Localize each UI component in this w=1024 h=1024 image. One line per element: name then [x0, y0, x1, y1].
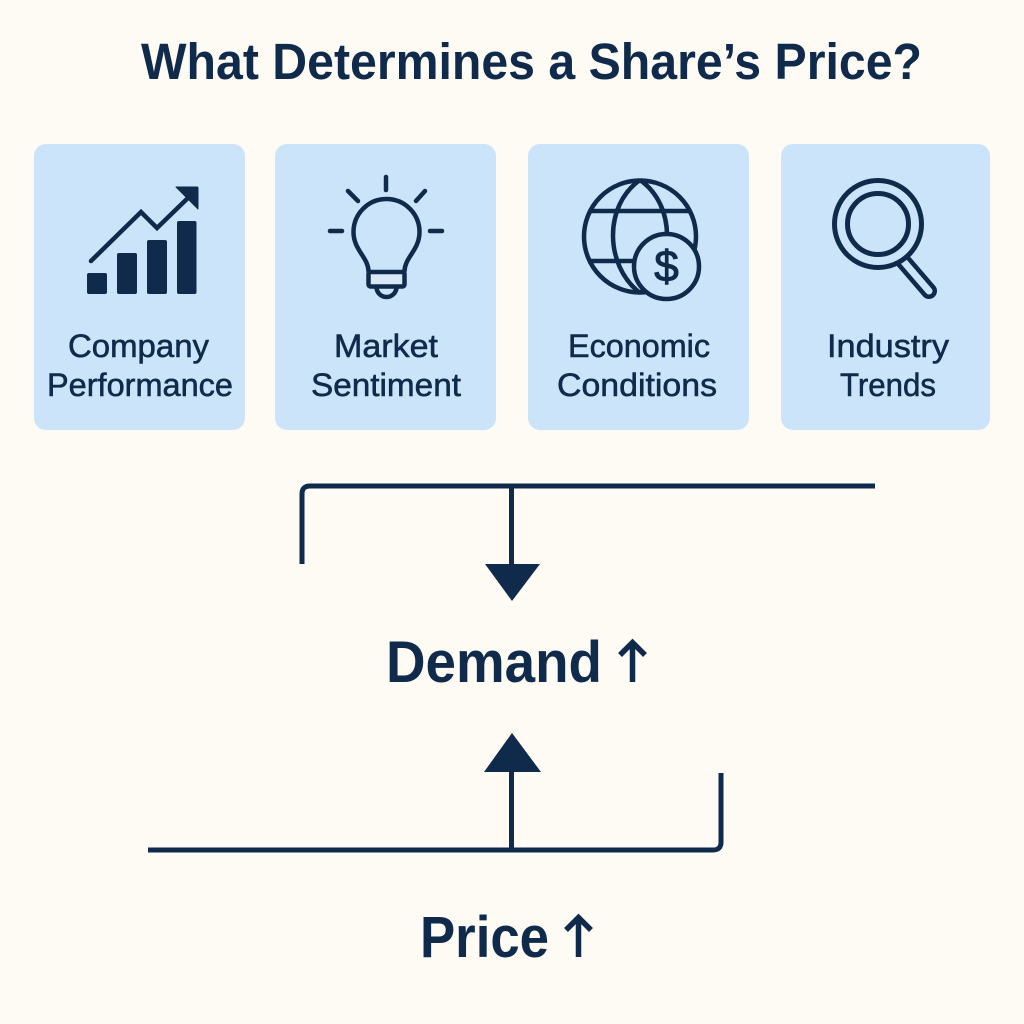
label: Sentiment: [311, 367, 461, 403]
label: [311, 328, 461, 403]
label: Conditions: [557, 367, 717, 403]
demand label: Demand: [386, 630, 602, 695]
label: Industry: [827, 328, 949, 364]
icon: globe with dollar coin: [584, 180, 699, 299]
top bracket with down arrow: [302, 486, 875, 601]
label: [557, 328, 717, 403]
panel: economic conditions: [528, 144, 749, 430]
panel: industry trends: [781, 144, 990, 430]
icon: magnifying glass: [834, 180, 929, 291]
label: [47, 328, 233, 403]
panel: company performance: [34, 144, 245, 430]
label: Market: [334, 328, 438, 364]
label: [827, 328, 949, 403]
panel: market sentiment: [275, 144, 496, 430]
icon: light bulb: [330, 177, 442, 297]
price label: Price: [420, 905, 549, 970]
icon: up arrow: [620, 642, 645, 682]
title: What Determines a Share’s Price?: [141, 33, 922, 90]
bottom bracket with up arrow: [148, 733, 721, 850]
icon: globe with dollar coin: $: [654, 242, 679, 291]
label: Company: [68, 328, 209, 364]
icon: rising bar chart: [87, 187, 198, 294]
label: Performance: [47, 367, 233, 403]
icon: up arrow: [566, 918, 591, 957]
label: Trends: [840, 367, 936, 403]
label: Economic: [568, 328, 710, 364]
